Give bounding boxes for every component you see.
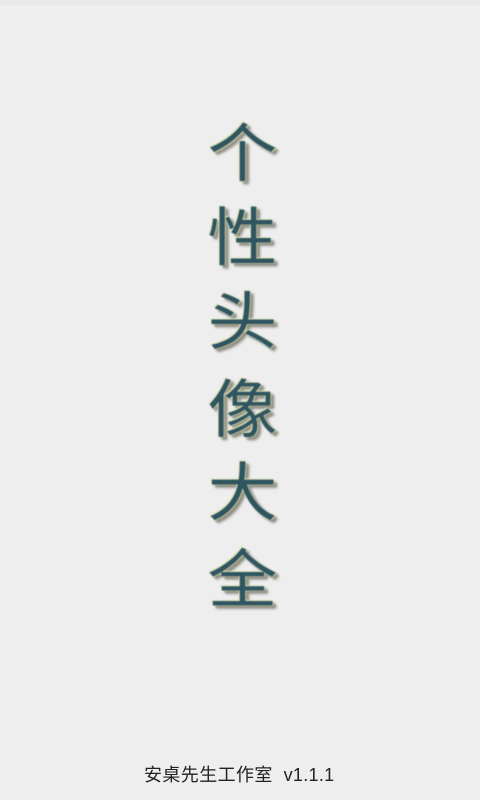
title character 3: 头 [208,287,278,357]
title character 2: 性 [208,203,278,273]
title character 6: 全 [208,545,278,615]
title character 1: 个 [208,119,278,189]
title: vertical app name [208,119,280,615]
title character 5: 大 [208,458,278,528]
title character 4: 像 [208,375,278,445]
credit: studio name and version: 安桌先生工作室 v1.1.1 [144,765,334,785]
